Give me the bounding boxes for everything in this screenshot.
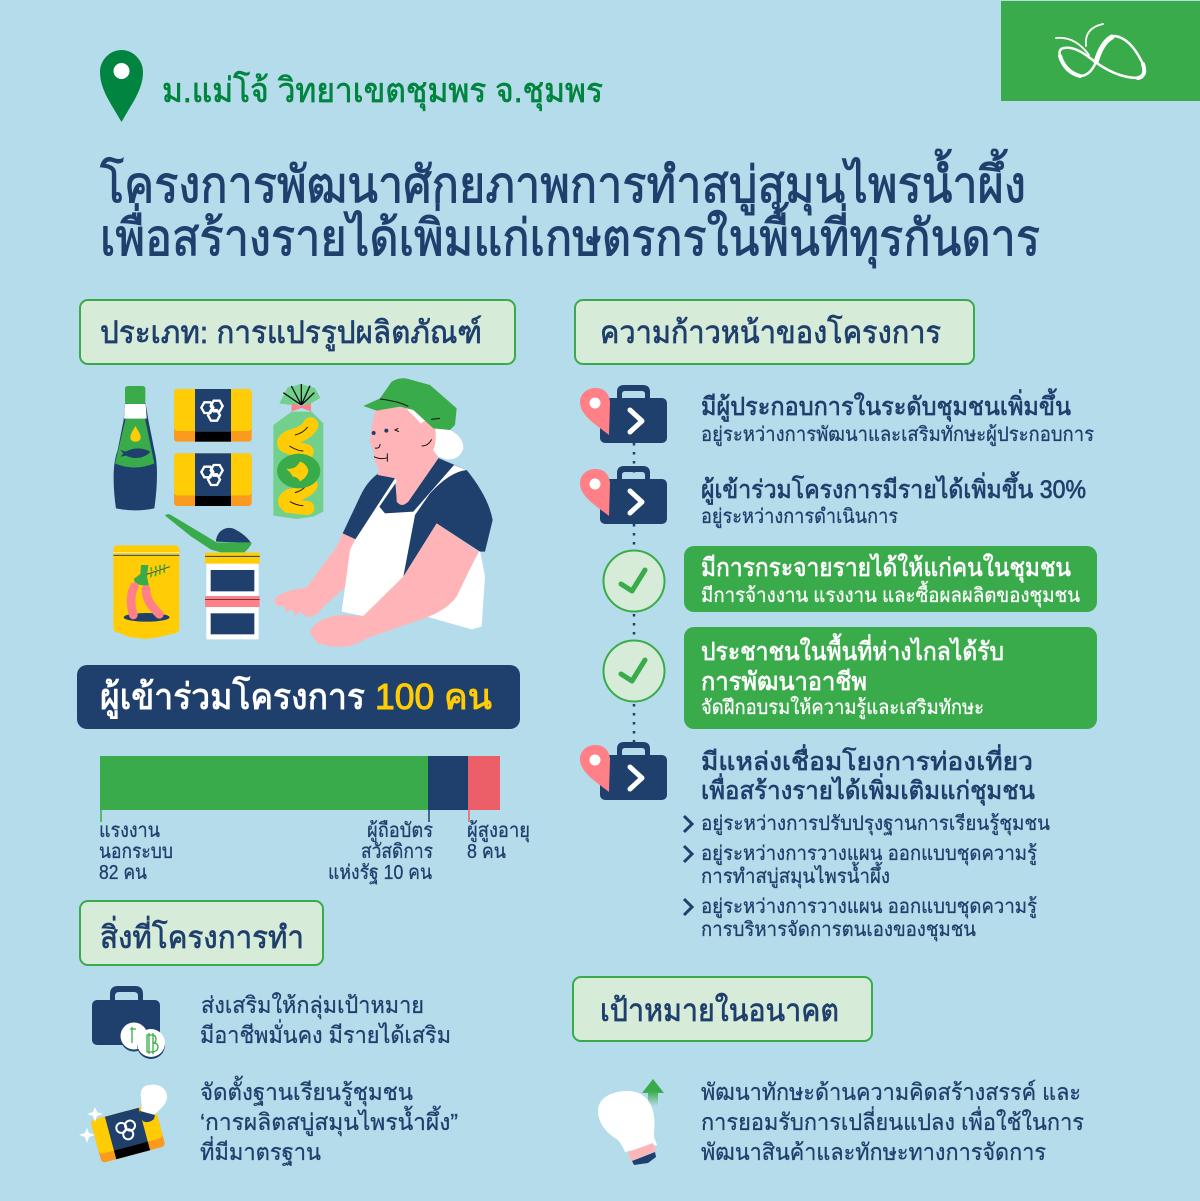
title: เพื่อสร้างรายได้เพิ่มแก่เกษตรกรในพื้นที่ทุรกันดาร — [100, 202, 1040, 268]
text: progress item 2: อยู่ระหว่างการดำเนินการ — [701, 506, 898, 529]
text: progress item 2 — [701, 471, 1086, 529]
icon: sauce bottle — [114, 386, 157, 510]
timeline dotted line — [633, 443, 635, 745]
text: progress item 5: มีแหล่งเชื่อมโยงการท่องเที่ยว — [701, 744, 1033, 776]
icon: soap bar top — [174, 389, 252, 442]
participants banner — [77, 665, 520, 729]
bar label: elderly: ผู้สูงอายุ — [467, 820, 530, 843]
text: progress item 5 — [701, 744, 1035, 806]
participants banner: ผู้เข้าร่วมโครงการ — [100, 676, 365, 719]
text: community learning base — [200, 1076, 458, 1166]
icon: briefcase pin 2 — [580, 466, 667, 524]
panel: progress item 4: ประชาชนในพื้นที่ห่างไกลได้รับ — [701, 633, 1004, 666]
panel: progress item 3 — [684, 546, 1097, 612]
icon: lightbulb with arrow — [598, 1079, 664, 1165]
icon: briefcase pin 1 — [580, 385, 667, 443]
panel: progress item 3: มีการกระจายรายได้ให้แก่คนในชุมชน — [701, 553, 1071, 583]
back arm — [274, 533, 355, 617]
icon: briefcase pin 3 — [580, 742, 667, 800]
location pin — [100, 50, 143, 122]
panel: product type heading — [80, 300, 515, 364]
title — [100, 149, 1040, 268]
icon: banana bag — [273, 384, 323, 519]
panel: what the project does heading: สิ่งที่โครงการทำ — [100, 916, 304, 955]
bar label: informal workers: แรงงาน — [99, 820, 160, 842]
bullet list — [684, 813, 1050, 942]
text: support target groups: มีอาชีพมั่นคง มีรายได้เสริม — [200, 1019, 451, 1048]
panel: progress heading — [575, 300, 974, 364]
bullet list: อยู่ระหว่างการปรับปรุงฐานการเรียนรู้ชุมชน — [701, 813, 1050, 836]
bar label: informal workers — [99, 820, 173, 884]
text: community learning base: ‘การผลิตสบู่สมุนไพรน้ำผึ้ง” — [200, 1106, 458, 1136]
bar label: welfare card holders — [328, 820, 433, 884]
logo badge — [1001, 1, 1200, 101]
panel: progress item 4: จัดฝึกอบรมให้ความรู้และเสริมทักษะ — [701, 696, 984, 720]
text: progress item 1: อยู่ระหว่างการพัฒนาและเสริมทักษะผู้ประกอบการ — [701, 424, 1094, 447]
title: โครงการพัฒนาศักยภาพการทำสบู่สมุนไพรน้ำผึ้ง — [100, 149, 1026, 215]
hat — [363, 378, 457, 430]
text: progress item 5: เพื่อสร้างรายได้เพิ่มเติมแก่ชุมชน — [701, 773, 1035, 806]
illustration: woman — [274, 378, 493, 647]
location text: ม.แม่โจ้ วิทยาเขตชุมพร จ.ชุมพร — [162, 71, 603, 111]
bullet list: การทำสบู่สมุนไพรน้ำผึ้ง — [701, 862, 890, 889]
text: future goals: การยอมรับการเปลี่ยนแปลง เพื่อใช้ในการ — [701, 1106, 1084, 1135]
head and neck — [370, 406, 438, 505]
icon: stacked jars — [205, 553, 260, 639]
text: future goals: พัฒนาทักษะด้านความคิดสร้างสรรค์ และ — [701, 1079, 1081, 1105]
icon: soap bar bottom — [174, 453, 252, 506]
bar label: welfare card holders: ผู้ถือบัตร — [367, 820, 433, 843]
panel: progress item 4: การพัฒนาอาชีพ — [701, 668, 867, 696]
ear — [419, 420, 434, 449]
bar label: welfare card holders: แห่งรัฐ 10 คน — [328, 862, 432, 884]
text: future goals — [701, 1079, 1084, 1165]
text: progress item 2: ผู้เข้าร่วมโครงการมีรายได้เพิ่มขึ้น 30% — [701, 471, 1086, 505]
front arm — [310, 523, 478, 647]
icon: briefcase with coins — [92, 986, 165, 1059]
bar label: elderly — [467, 820, 530, 863]
bar label: welfare card holders: สวัสดิการ — [361, 841, 433, 863]
text: community learning base: จัดตั้งฐานเรียนรู้ชุมชน — [200, 1076, 413, 1106]
bullet list: อยู่ระหว่างการวางแผน ออกแบบชุดความรู้ — [701, 896, 1037, 919]
shirt — [343, 457, 493, 577]
skirt — [427, 550, 485, 629]
icon: check 1 — [604, 550, 664, 612]
text: progress item 1: มีผู้ประกอบการในระดับชุมชนเพิ่มขึ้น — [701, 388, 1071, 422]
icon: herb pouch — [113, 545, 179, 639]
illustration: products and woman — [113, 378, 493, 647]
text: progress item 1 — [701, 388, 1094, 447]
panel: future goals heading: เป้าหมายในอนาคต — [600, 993, 839, 1028]
panel: future goals heading — [573, 977, 872, 1041]
icon: scoop with powder — [165, 514, 252, 552]
bar label: informal workers: นอกระบบ — [99, 841, 173, 863]
text: future goals: พัฒนาสินค้าและทักษะทางการจัดการ — [701, 1139, 1046, 1165]
text: community learning base: ที่มีมาตรฐาน — [200, 1136, 321, 1166]
bullet list: อยู่ระหว่างการวางแผน ออกแบบชุดความรู้ — [701, 843, 1037, 866]
bar label: elderly: 8 คน — [467, 841, 506, 863]
hair bun — [430, 427, 463, 459]
text: support target groups: ส่งเสริมให้กลุ่มเป้าหมาย — [201, 992, 424, 1019]
panel: what the project does heading — [80, 901, 323, 965]
bar label: informal workers: 82 คน — [99, 862, 147, 884]
facial details — [374, 399, 440, 462]
participants banner: 100 คน — [375, 676, 492, 717]
panel: progress item 4 — [684, 627, 1097, 729]
icon: check 2 — [604, 640, 664, 702]
bullet list: การบริหารจัดการตนเองของชุมชน — [701, 919, 976, 942]
icon: soap with lightbulb — [79, 1085, 167, 1163]
panel: progress item 3: มีการจ้างงาน แรงงาน และซื้อผลผลิตของชุมชน — [701, 581, 1080, 608]
stacked bar chart — [100, 756, 500, 822]
text: support target groups — [200, 992, 451, 1048]
panel: progress heading: ความก้าวหน้าของโครงการ — [600, 315, 941, 350]
apron — [342, 465, 467, 616]
hair at temple — [404, 403, 434, 423]
panel: product type heading: ประเภท: การแปรรูปผลิตภัณฑ์ — [100, 315, 482, 351]
